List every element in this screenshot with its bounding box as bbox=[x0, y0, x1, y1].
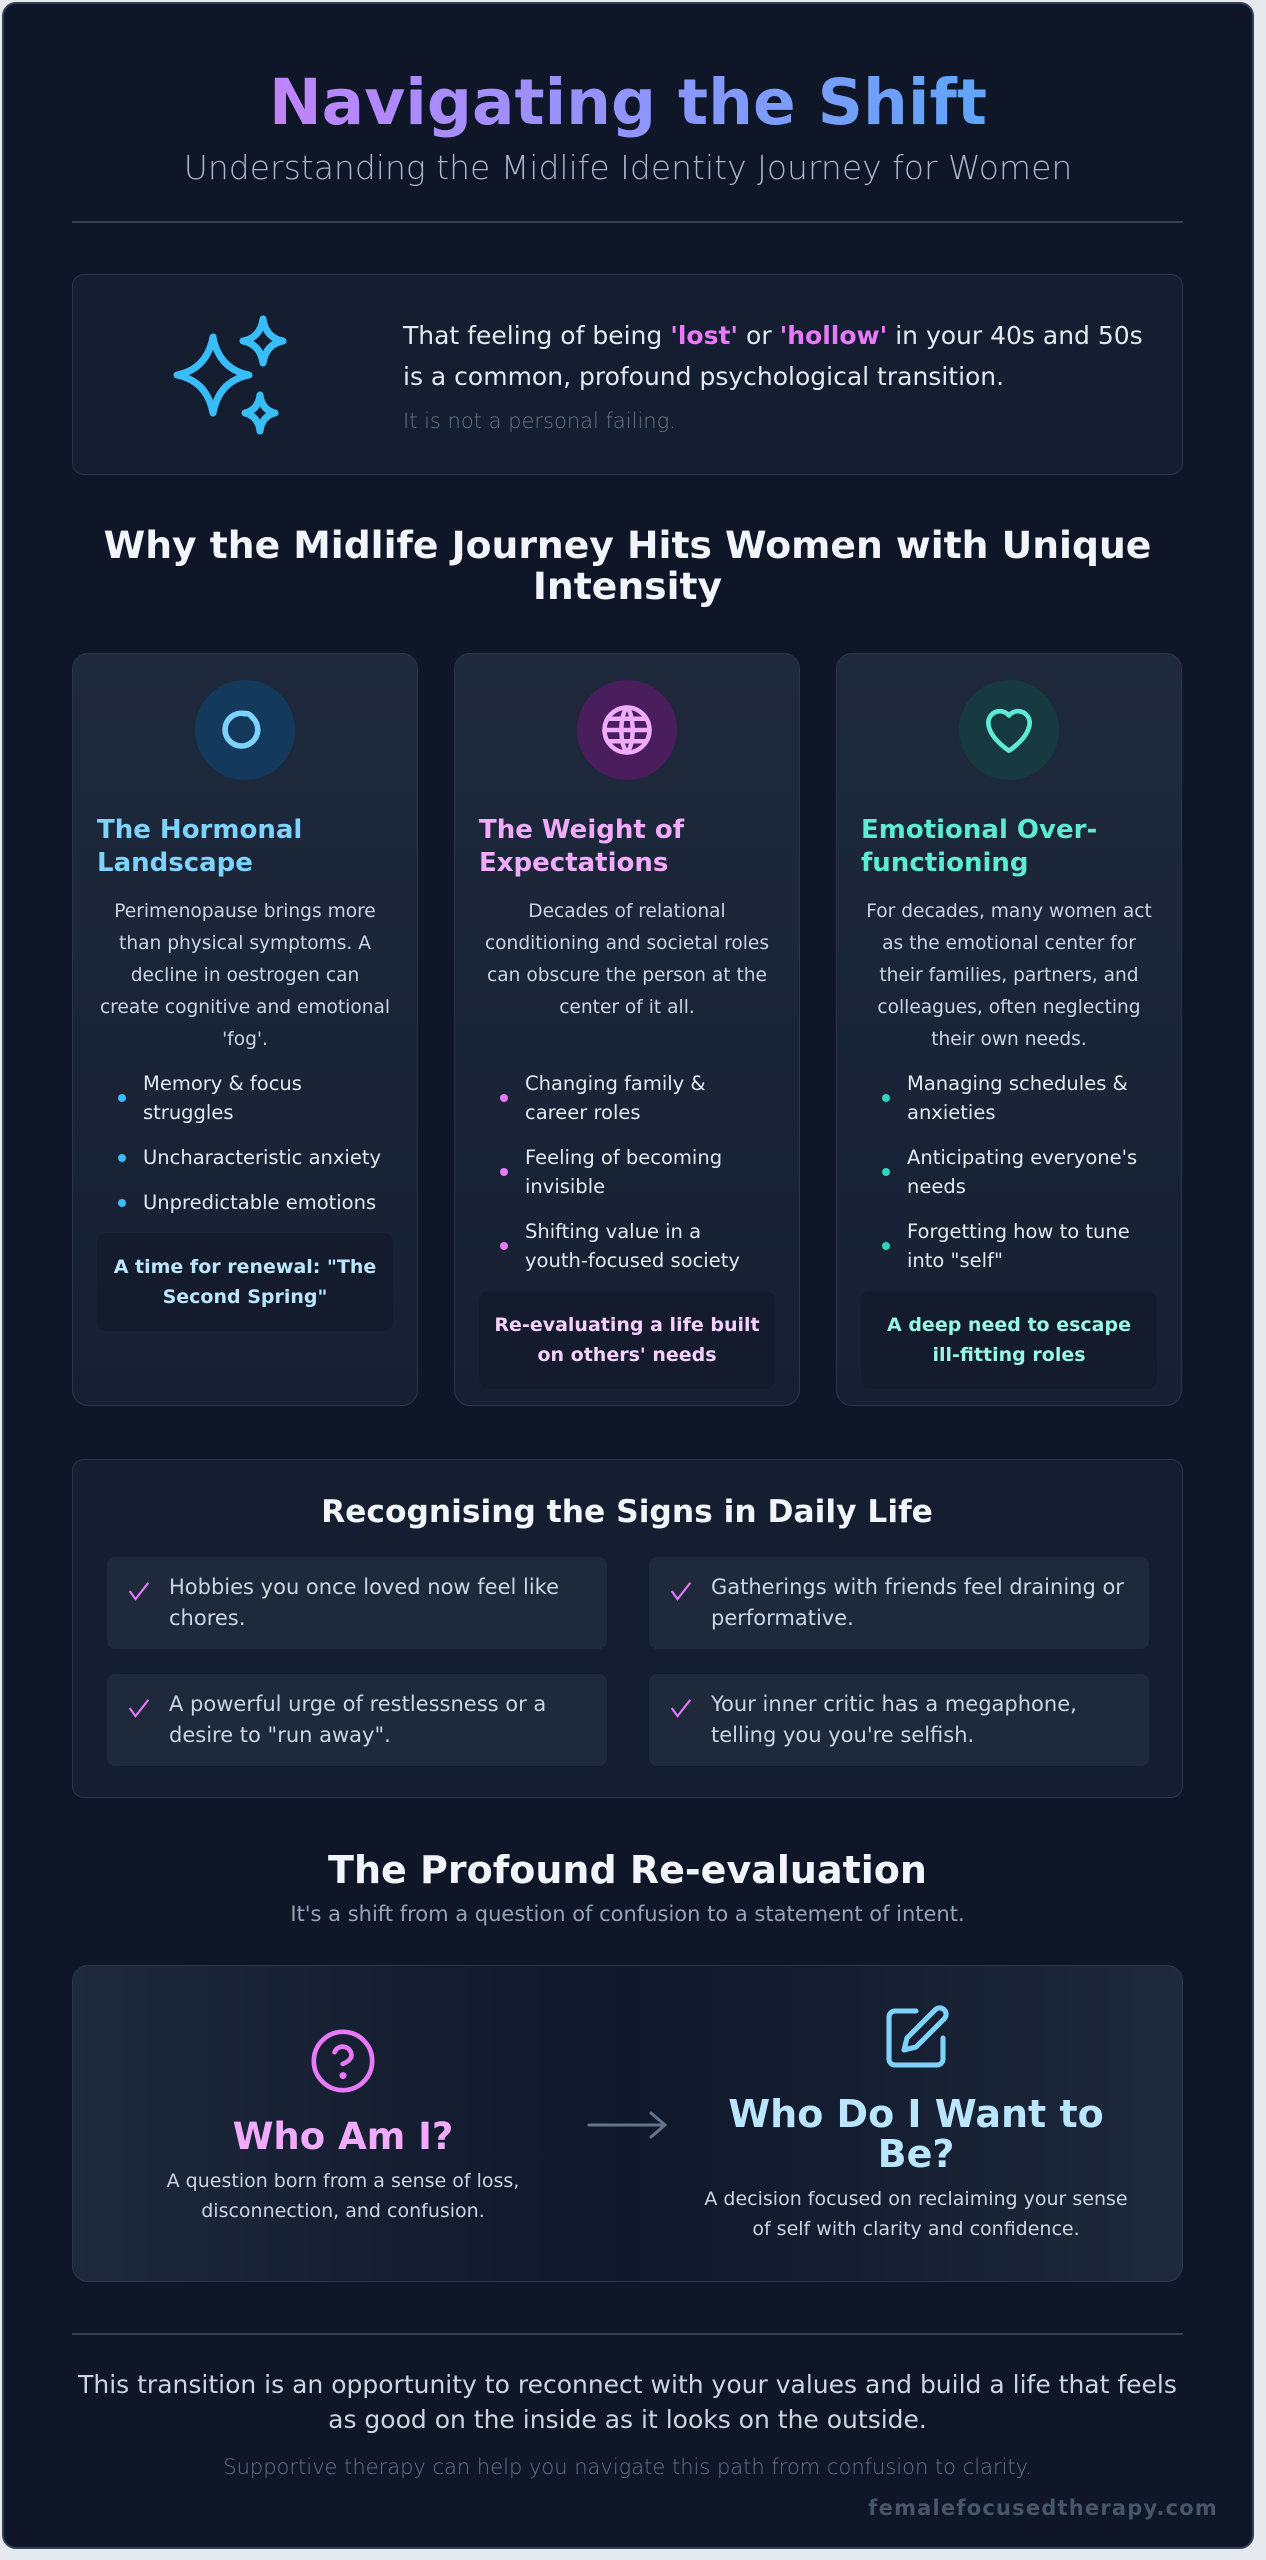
title: Navigating the Shift bbox=[269, 66, 987, 139]
panel: intro bbox=[72, 274, 1183, 475]
panel: hormonal: 'fog'. bbox=[222, 1029, 268, 1050]
sign 2: Gatherings with friends feel draining or performative. bbox=[711, 1575, 1124, 1630]
panel: re-evaluation bbox=[72, 1965, 1183, 2282]
panel: expectations bbox=[454, 653, 800, 1406]
panel: hormonal: struggles bbox=[143, 1101, 234, 1124]
panel: expectations: Feeling of becoming bbox=[525, 1146, 722, 1169]
panel: emotional: their families, partners, and bbox=[879, 965, 1139, 986]
heading: why: Why the Midlife Journey Hits Women with Unique Intensity bbox=[104, 523, 1151, 608]
panel: emotional: Managing schedules & bbox=[907, 1072, 1128, 1095]
closing text: This transition is an opportunity to reconnect with your values and build a life that feels as good on the inside as it looks on the outside. bbox=[78, 2370, 1177, 2434]
panel: expectations: Changing family & bbox=[525, 1072, 706, 1095]
panel: expectations: can obscure the person at the bbox=[487, 965, 767, 986]
panel: emotional: Emotional Over-functioning bbox=[861, 815, 1097, 878]
right: who do i want to be: A decision focused on reclaiming your sense bbox=[704, 2188, 1128, 2210]
panel: hormonal: create cognitive and emotional bbox=[100, 997, 390, 1018]
icon: question bbox=[312, 2030, 374, 2092]
panel: expectations: career roles bbox=[525, 1101, 641, 1124]
panel: emotional: into "self" bbox=[907, 1249, 1003, 1272]
footer url: femalefocusedtherapy.com bbox=[868, 2496, 1218, 2520]
panel: expectations: The Weight of Expectations bbox=[479, 815, 684, 878]
subheading: It's a shift from a question of confusion to a statement of intent. bbox=[290, 1902, 965, 1926]
panel: hormonal: than physical symptoms. A bbox=[119, 933, 371, 954]
intro text: That feeling of being 'lost' or 'hollow' in your 40s and 50s is a common, profound psychological transition. bbox=[403, 321, 1143, 391]
sign 4: Your inner critic has a megaphone, telling you you're selfish. bbox=[711, 1692, 1077, 1747]
sign 1 bbox=[107, 1557, 607, 1649]
intro text bbox=[402, 321, 1143, 433]
left: who am i: A question born from a sense of loss, bbox=[167, 2170, 519, 2192]
panel: hormonal: Perimenopause brings more bbox=[114, 901, 376, 922]
right: who do i want to be: of self with clarity and confidence. bbox=[752, 2218, 1080, 2240]
panel: emotional: colleagues, often neglecting bbox=[877, 997, 1141, 1018]
panel: expectations: center of it all. bbox=[559, 997, 695, 1018]
panel: hormonal: Uncharacteristic anxiety bbox=[143, 1146, 381, 1169]
heading: signs: Recognising the Signs in Daily Life bbox=[321, 1494, 933, 1530]
icon: ring bbox=[195, 680, 295, 780]
panel: hormonal: The Hormonal Landscape bbox=[97, 815, 302, 878]
panel: emotional: as the emotional center for bbox=[882, 933, 1136, 954]
panel: emotional: Forgetting how to tune bbox=[907, 1220, 1130, 1243]
icon: heart bbox=[959, 680, 1059, 780]
sign 3: A powerful urge of restlessness or a desire to "run away". bbox=[169, 1692, 546, 1747]
panel: emotional: Anticipating everyone's bbox=[907, 1146, 1137, 1169]
icon: pencil bbox=[886, 2005, 949, 2068]
panel: emotional bbox=[836, 653, 1182, 1406]
panel: expectations: Shifting value in a bbox=[525, 1220, 701, 1243]
left: who am i bbox=[166, 2030, 519, 2222]
panel: signs bbox=[72, 1459, 1183, 1798]
panel: emotional: their own needs. bbox=[931, 1029, 1087, 1050]
panel: expectations: invisible bbox=[525, 1175, 605, 1198]
subtitle: Understanding the Midlife Identity Journey for Women bbox=[184, 148, 1072, 187]
panel: emotional: For decades, many women act bbox=[866, 901, 1152, 922]
icon: sparkles bbox=[174, 316, 286, 434]
panel: emotional: A deep need to escape ill-fitting roles bbox=[887, 1314, 1131, 1366]
panel: expectations: Decades of relational bbox=[528, 901, 726, 922]
panel: expectations: conditioning and societal roles bbox=[485, 933, 769, 954]
right: who do i want to be bbox=[704, 2005, 1128, 2240]
intro text: It is not a personal failing. bbox=[403, 409, 676, 433]
sign 3 bbox=[107, 1674, 607, 1766]
closing note: Supportive therapy can help you navigate this path from confusion to clarity. bbox=[223, 2455, 1032, 2479]
panel: hormonal: decline in oestrogen can bbox=[131, 965, 359, 986]
heading: re-evaluation: The Profound Re-evaluation bbox=[328, 1848, 927, 1892]
left: who am i: Who Am I? bbox=[233, 2115, 453, 2158]
panel: hormonal: Memory & focus bbox=[143, 1072, 302, 1095]
right: who do i want to be: Who Do I Want to Be? bbox=[728, 2092, 1104, 2176]
panel: expectations: Re-evaluating a life built on others' needs bbox=[494, 1314, 760, 1366]
panel: emotional: needs bbox=[907, 1175, 966, 1198]
panel: expectations: youth-focused society bbox=[525, 1249, 740, 1272]
sign 2 bbox=[649, 1557, 1149, 1649]
panel: hormonal: A time for renewal: "The Second Spring" bbox=[114, 1256, 376, 1308]
arrow bbox=[588, 2111, 668, 2139]
panel: emotional: anxieties bbox=[907, 1101, 995, 1124]
panel: hormonal bbox=[72, 653, 418, 1406]
icon: globe bbox=[577, 680, 677, 780]
panel: hormonal: Unpredictable emotions bbox=[143, 1191, 376, 1214]
sign 1: Hobbies you once loved now feel like chores. bbox=[169, 1575, 559, 1630]
left: who am i: disconnection, and confusion. bbox=[201, 2200, 485, 2222]
sign 4 bbox=[649, 1674, 1149, 1766]
